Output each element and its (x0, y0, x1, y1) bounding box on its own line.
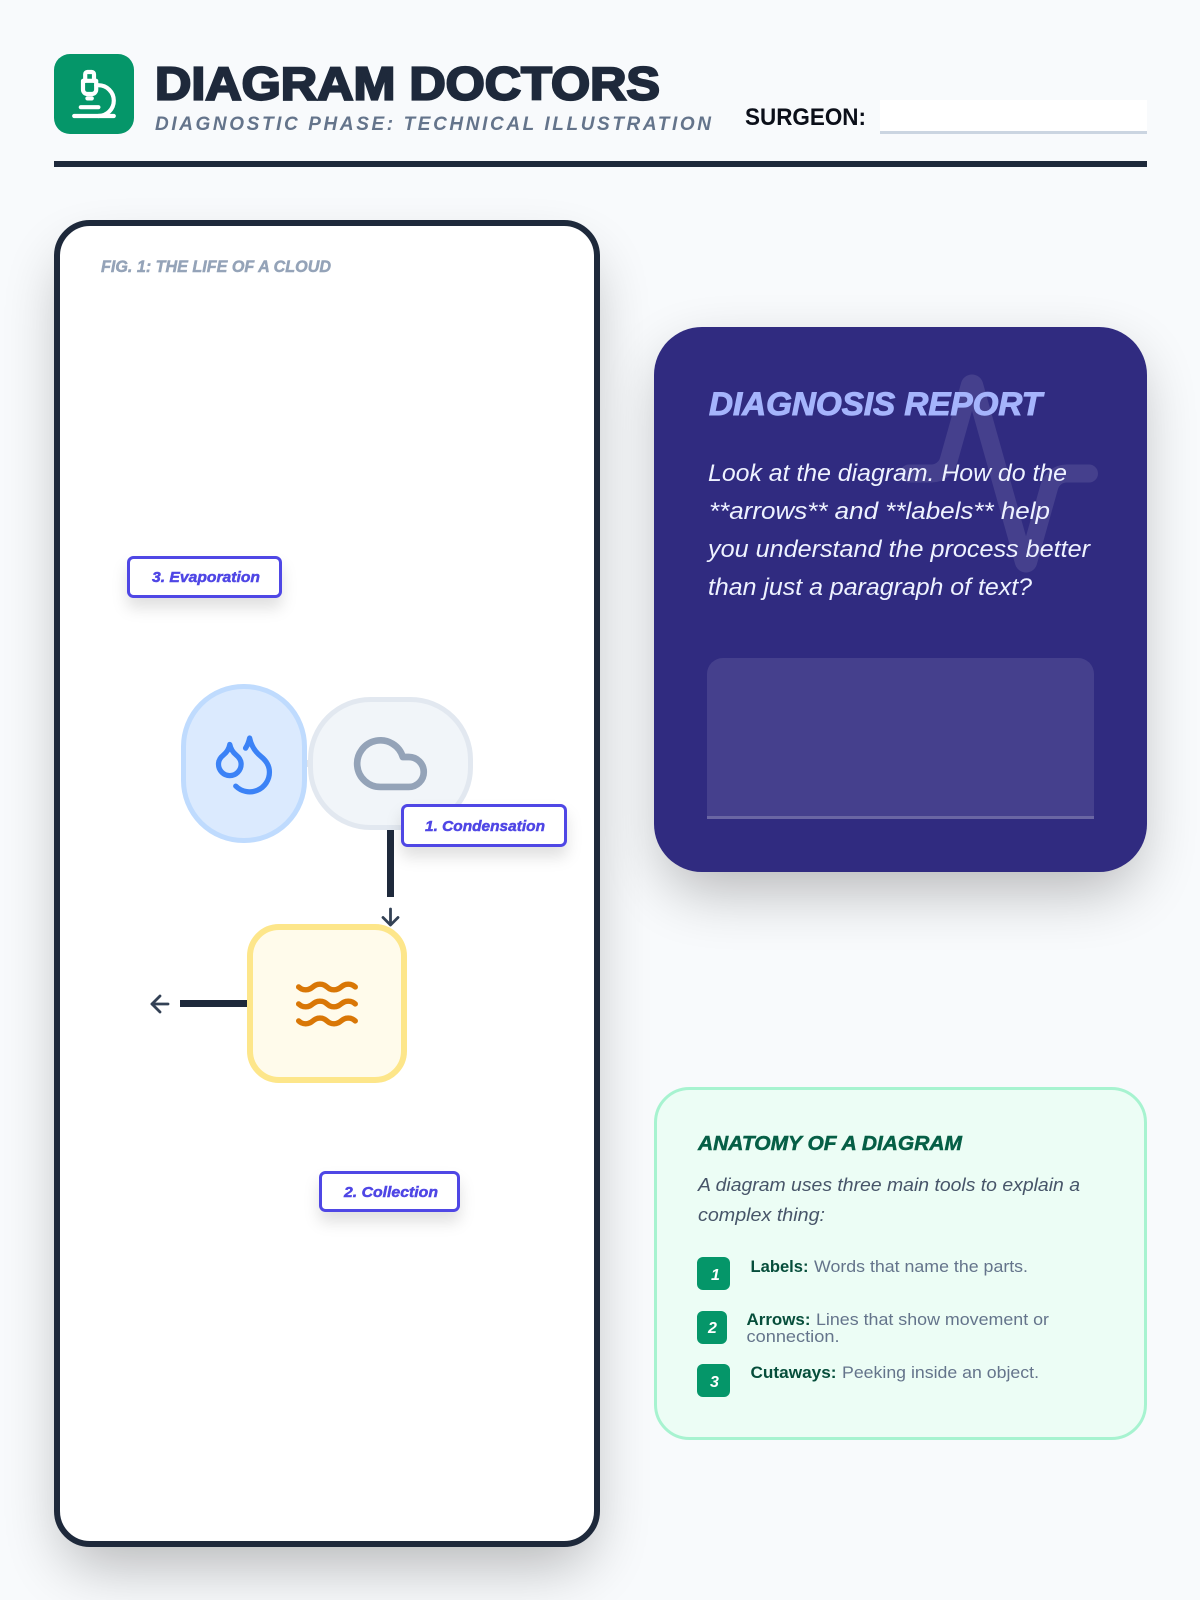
item 1: labels: Labels: (750, 1257, 808, 1276)
icon: microscope badge (54, 54, 134, 134)
arrow: collection to evaporation (152, 996, 247, 1012)
report question: than just a paragraph of text? (708, 574, 1032, 601)
label: evaporation (128, 558, 280, 596)
item 2: arrows: connection. (746, 1327, 840, 1346)
label: collection (320, 1172, 458, 1210)
header (54, 54, 1147, 167)
report question: Look at the diagram. How do the (708, 460, 1067, 487)
item 1: labels: 1 (711, 1267, 720, 1284)
figure heading: FIG. 1: THE LIFE OF A CLOUD (101, 258, 331, 276)
item 1: labels (697, 1257, 1028, 1290)
item 1: labels: Words that name the parts. (814, 1257, 1028, 1276)
label: condensation (402, 806, 566, 846)
item 3: cutaways: Cutaways: (750, 1363, 836, 1382)
title: DIAGRAM DOCTORS (155, 58, 660, 110)
report question (706, 460, 1091, 601)
answer box (707, 658, 1094, 819)
report question: **arrows** and **labels** help (709, 498, 1050, 525)
report heading: DIAGNOSIS REPORT (709, 386, 1045, 422)
connector tick (307, 760, 309, 767)
label: collection: 2. Collection (343, 1184, 438, 1201)
node: cloud (310, 700, 470, 828)
item 2: arrows: Arrows: (746, 1310, 810, 1329)
anatomy intro (697, 1175, 1080, 1225)
surgeon name field (880, 100, 1147, 134)
label: condensation: 1. Condensation (425, 818, 545, 835)
item 3: cutaways: Peeking inside an object. (842, 1363, 1039, 1382)
item 2: arrows: 2 (707, 1320, 717, 1337)
anatomy heading: ANATOMY OF A DIAGRAM (697, 1133, 963, 1155)
arrow: cloud to collection (383, 830, 398, 925)
icon: pulse watermark (909, 384, 1089, 564)
panel: anatomy of a diagram (656, 1088, 1146, 1438)
report question: you understand the process better (706, 536, 1091, 563)
anatomy intro: A diagram uses three main tools to explain a (697, 1175, 1080, 1195)
item 3: cutaways (697, 1363, 1039, 1397)
node: water collection (250, 927, 404, 1080)
panel: diagnosis report (654, 327, 1147, 890)
node: water droplets (184, 686, 304, 840)
surgeon label: SURGEON: (745, 104, 866, 131)
item 2: arrows (697, 1310, 1049, 1346)
subtitle: DIAGNOSTIC PHASE: TECHNICAL ILLUSTRATION (155, 114, 712, 135)
item 3: cutaways: 3 (710, 1374, 719, 1391)
panel: figure 1 diagram (57, 223, 597, 1565)
label: evaporation: 3. Evaporation (152, 569, 260, 586)
item 2: arrows: Lines that show movement or (816, 1310, 1049, 1329)
anatomy intro: complex thing: (698, 1205, 825, 1225)
